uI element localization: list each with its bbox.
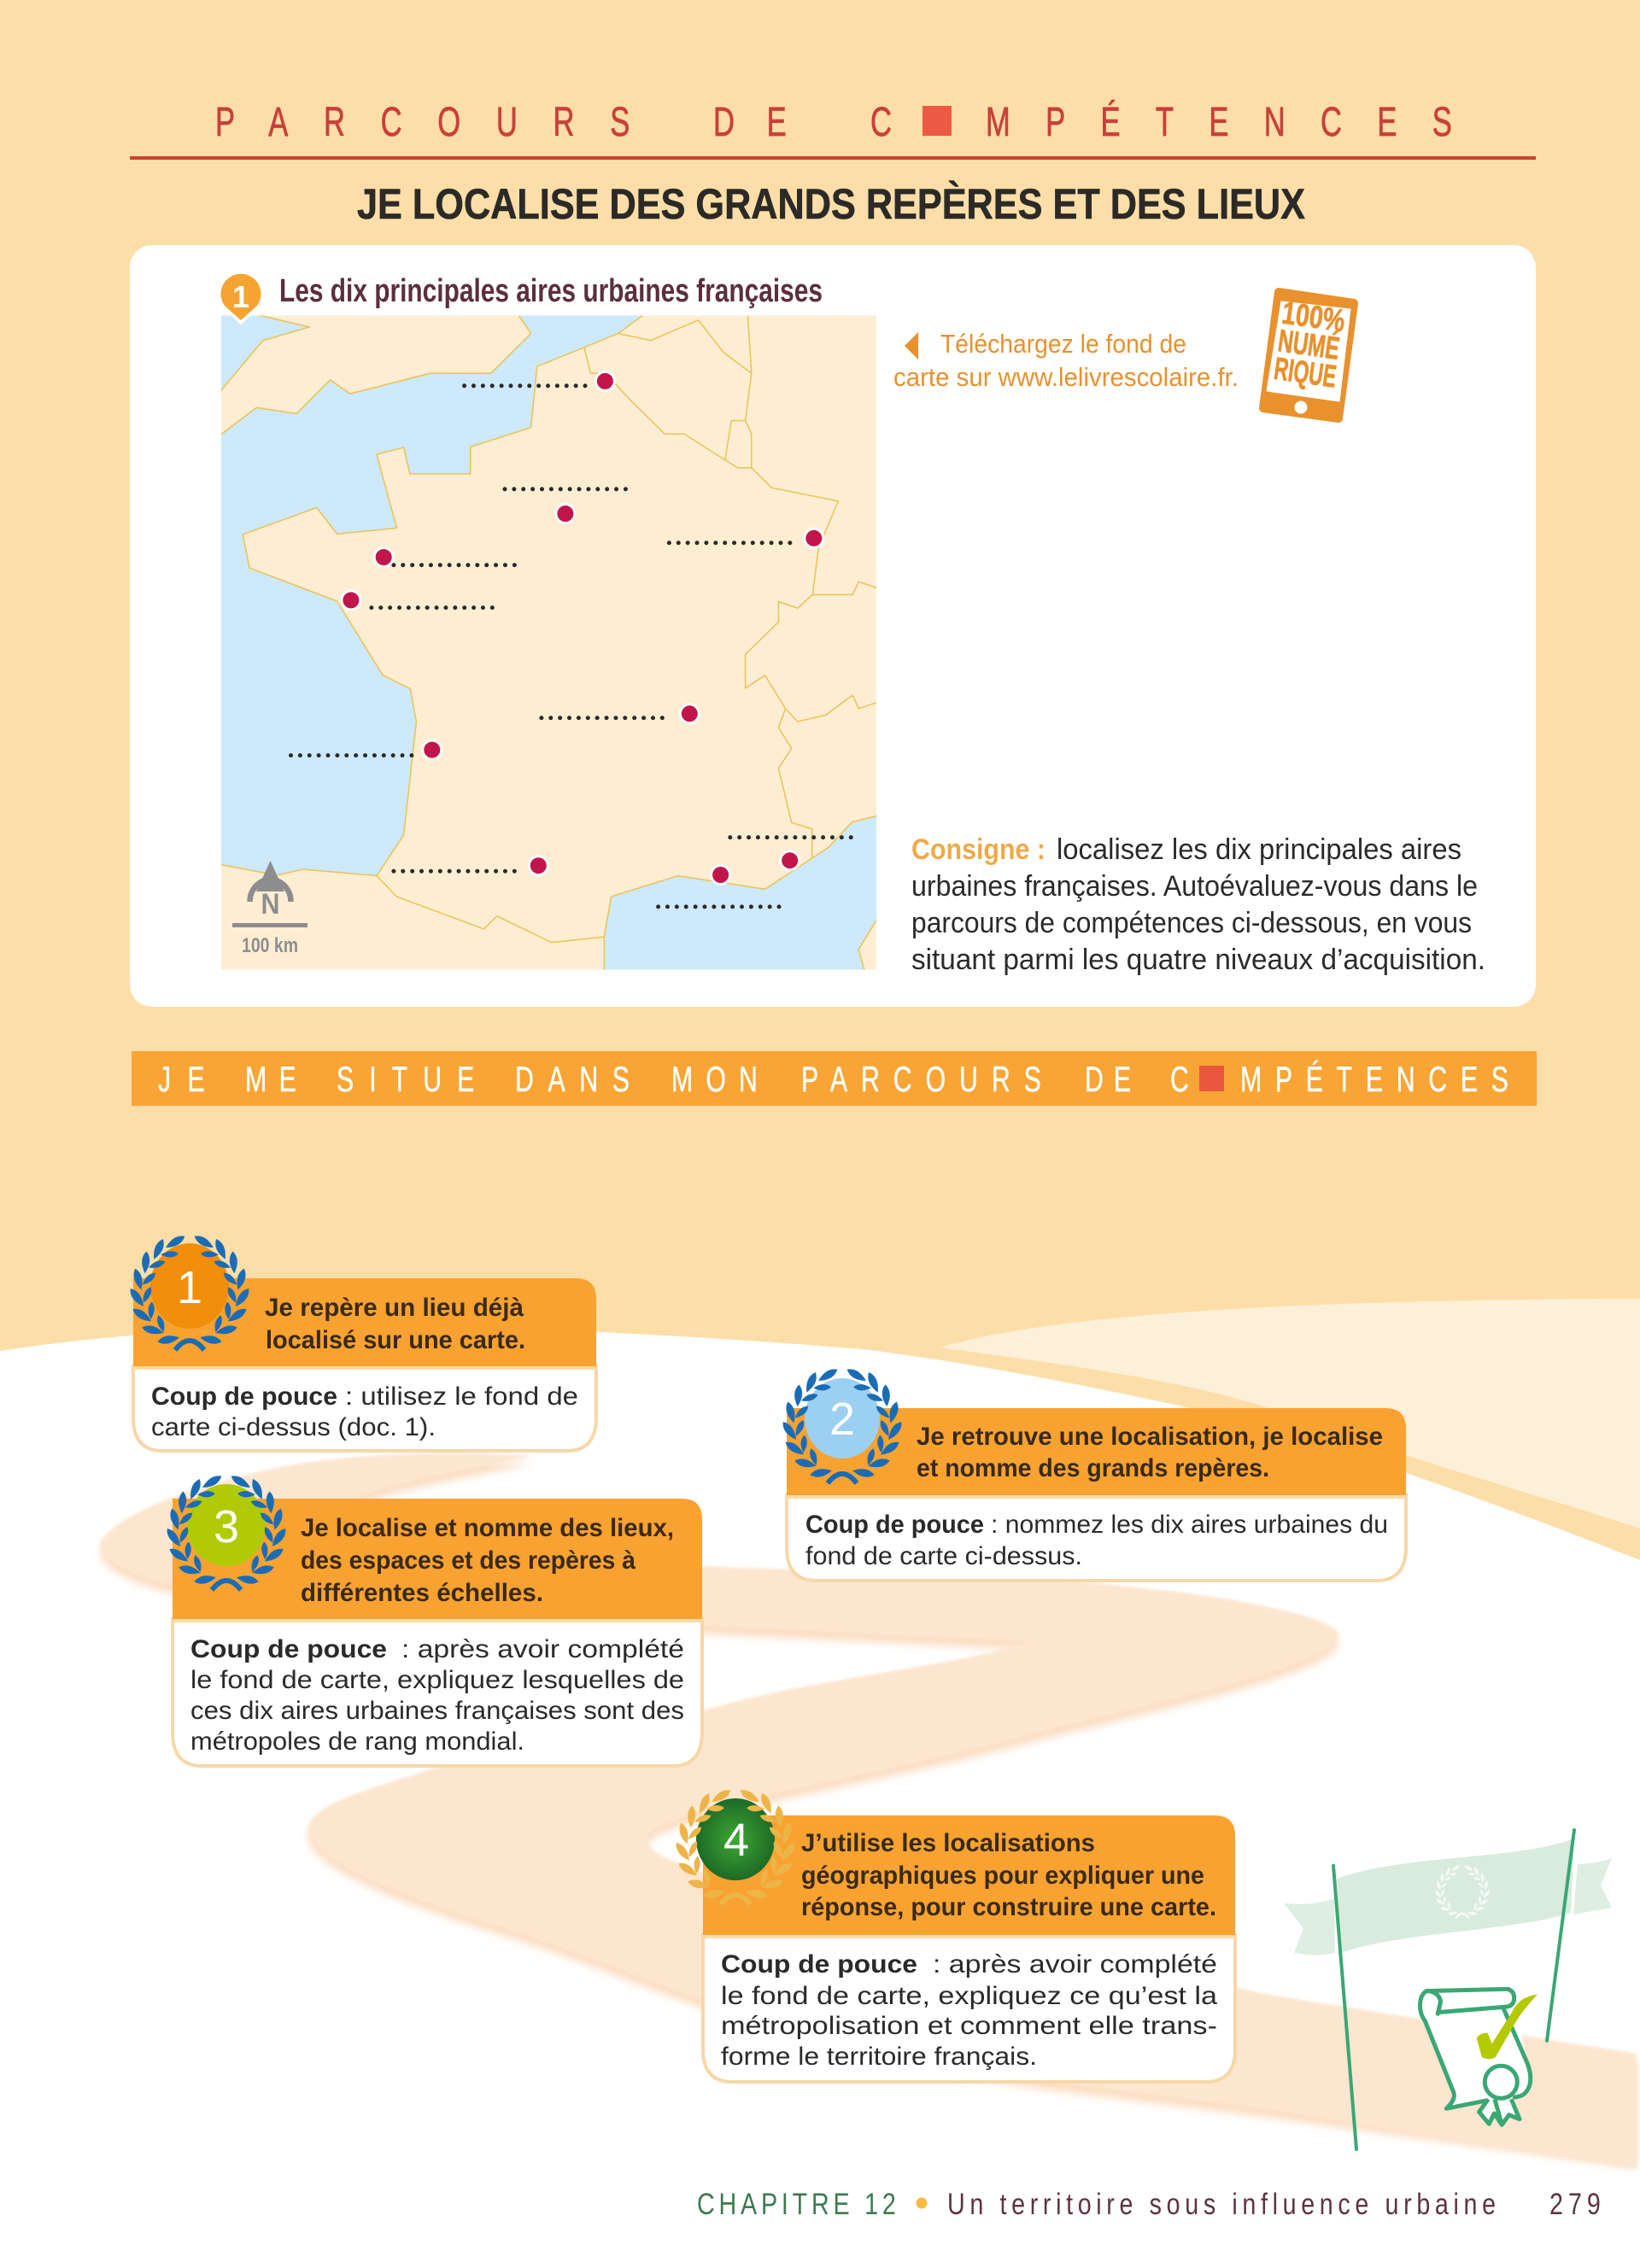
icon: diploma with check mark (1420, 1989, 1538, 2125)
banner: je me situe: MPÉTENCES (1240, 1059, 1508, 1099)
icon: 100% numérique phone (1263, 292, 1354, 418)
level 1 medal (127, 1233, 252, 1350)
instructions: parcours de compétences ci-dessous, en vous (911, 907, 1472, 939)
winding road (101, 1453, 1637, 2169)
level 3 hint: Coup de pouce (190, 1635, 387, 1663)
instructions: situant parmi les quatre niveaux d’acquisition. (911, 944, 1485, 976)
download note: Téléchargez le fond de (940, 329, 1186, 359)
north arrow and scale: 100 km (242, 934, 298, 957)
title: parcours de compétences: DE (713, 98, 787, 144)
finish flag (1284, 1830, 1612, 2149)
download note: carte sur www.lelivrescolaire.fr. (893, 362, 1239, 392)
level 4 medal: 4 (723, 1815, 749, 1866)
level 4 hint: Coup de pouce (721, 1950, 917, 1979)
title: parcours de compétences (215, 98, 1452, 144)
level 4 title (801, 1829, 1216, 1921)
level 3 hint: : après avoir complété (401, 1635, 684, 1663)
level 3 medal: 3 (214, 1501, 239, 1552)
banner: je me situe: ME (245, 1059, 296, 1099)
footer: CHAPITRE 12 (697, 2187, 896, 2221)
level 4 title: J’utilise les localisations (801, 1829, 1095, 1857)
document number pin: 1 (232, 279, 249, 314)
level 3 title (301, 1514, 674, 1607)
level 1 medal: 1 (177, 1262, 202, 1313)
title: parcours de compétences: MPÉTENCES (986, 98, 1452, 144)
level 1 hint: carte ci-dessus (doc. 1). (151, 1413, 436, 1441)
document title: Les dix principales aires urbaines françaises (279, 273, 823, 309)
banner: je me situe: SITUE (337, 1059, 474, 1099)
level 1 title: localisé sur une carte. (266, 1326, 525, 1354)
north arrow and scale: N (261, 888, 280, 921)
dotted answer lines (290, 386, 852, 907)
level 4 card (673, 1787, 1235, 2082)
level 4 hint: forme le territoire français. (721, 2043, 1037, 2071)
level 2 title: Je retrouve une localisation, je localise (917, 1423, 1383, 1451)
footer: Un territoire sous influence urbaine (947, 2187, 1496, 2221)
banner: je me situe: MON (671, 1059, 758, 1099)
title: parcours de compétences: C (870, 98, 892, 144)
level 3 hint: métropoles de rang mondial. (190, 1727, 524, 1756)
footer (697, 2187, 1601, 2221)
level 4 hint: métropolisation et comment elle trans- (721, 2012, 1217, 2040)
level 3 hint: le fond de carte, expliquez lesquelles de (190, 1666, 684, 1694)
map of France (221, 316, 876, 970)
level 2 hint: Coup de pouce (805, 1511, 984, 1539)
level 4 hint: le fond de carte, expliquez ce qu’est la (721, 1982, 1217, 2010)
banner: je me situe: DE (1085, 1059, 1131, 1099)
level 2 card (780, 1366, 1406, 1581)
level 2 title (917, 1423, 1383, 1482)
level 1 hint (151, 1382, 578, 1441)
footer: 279 (1549, 2187, 1601, 2221)
level 1 card (127, 1233, 596, 1451)
level 3 hint: ces dix aires urbaines françaises sont des (190, 1697, 684, 1725)
instructions: localisez les dix principales aires (1057, 833, 1461, 866)
level 3 title: différentes échelles. (301, 1579, 543, 1607)
panel: map document (130, 245, 1536, 1007)
level 1 hint: Coup de pouce (151, 1382, 337, 1411)
level 4 title: géographiques pour expliquer une (801, 1862, 1204, 1890)
level 3 hint (190, 1635, 684, 1756)
level 2 hint: fond de carte ci-dessus. (805, 1542, 1082, 1570)
level 4 medal (673, 1787, 798, 1904)
level 2 medal (780, 1366, 905, 1483)
level 3 card (164, 1473, 702, 1766)
instructions: Consigne : (911, 833, 1046, 866)
level 2 title: et nomme des grands repères. (917, 1454, 1269, 1482)
document number pin (220, 274, 261, 324)
title: parcours de compétences: PARCOURS (215, 98, 630, 144)
icon: 100% numérique phone: RIQUE (1272, 351, 1338, 395)
icon: 100% numérique phone: NUMÉ (1276, 323, 1342, 366)
level 2 hint: : nommez les dix aires urbaines du (991, 1511, 1388, 1539)
level 4 title: réponse, pour construire une carte. (801, 1893, 1216, 1921)
banner: je me situe: DANS (515, 1059, 630, 1099)
level 1 hint: : utilisez le fond de (345, 1382, 578, 1411)
heading: JE LOCALISE DES GRANDS REPÈRES ET DES LIEUX (357, 180, 1305, 228)
download note (893, 329, 1239, 392)
icon: 100% numérique phone: 100% (1280, 295, 1347, 338)
banner: je me situe: PARCOURS (801, 1059, 1041, 1099)
banner: je me situe: C (1170, 1059, 1189, 1099)
level 1 title: Je repère un lieu déjà (265, 1294, 524, 1322)
banner: je me situe (132, 1051, 1537, 1106)
level 2 hint (805, 1511, 1388, 1570)
north arrow and scale (232, 861, 308, 957)
instructions: urbaines françaises. Autoévaluez-vous dans le (911, 870, 1478, 903)
level 3 title: des espaces et des repères à (301, 1546, 636, 1575)
level 3 medal (164, 1473, 289, 1590)
level 4 hint: : après avoir complété (933, 1950, 1217, 1979)
city markers (342, 371, 823, 884)
level 1 title (265, 1294, 525, 1354)
level 2 medal: 2 (829, 1394, 855, 1445)
banner: je me situe: JE (158, 1059, 205, 1099)
instructions (911, 833, 1485, 976)
level 3 title: Je localise et nomme des lieux, (301, 1514, 674, 1542)
level 4 hint (721, 1950, 1217, 2071)
